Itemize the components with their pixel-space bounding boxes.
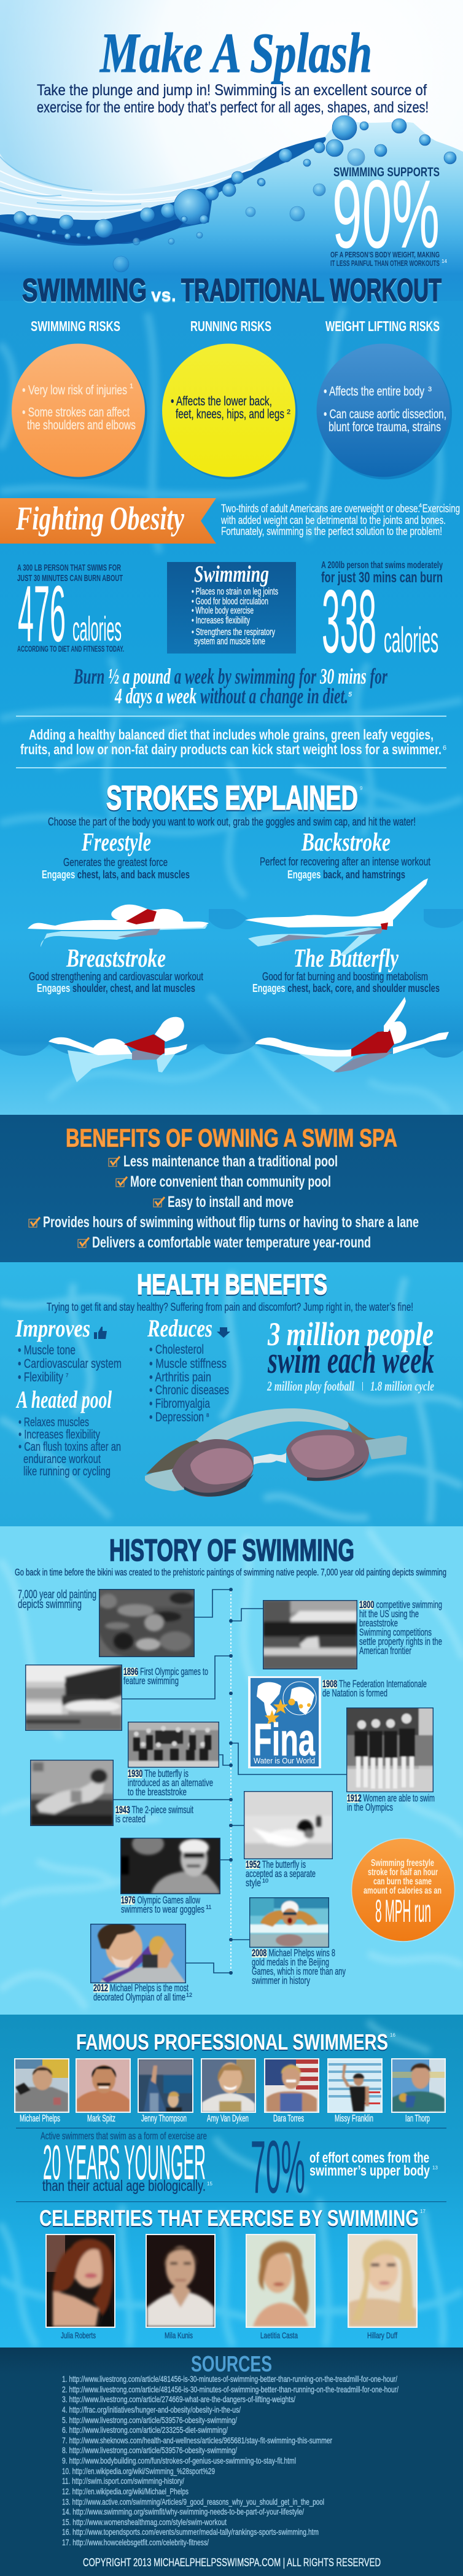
famous swimmers background xyxy=(0,2015,463,2348)
photo: 1800 competition xyxy=(263,1600,357,1669)
health benefits background xyxy=(0,1262,463,1526)
intro text xyxy=(37,82,429,116)
text: 1930: to the breaststroke xyxy=(128,1786,187,1798)
celebrity names: Mila Kunis xyxy=(165,2330,193,2340)
heading: strokes explained: 9 xyxy=(360,786,363,791)
stroke: backstroke: Backstroke xyxy=(301,829,391,857)
text: 1908 xyxy=(322,1678,427,1699)
heading: strokes explained xyxy=(48,778,416,828)
text: 2008: gold medals in the Beijing xyxy=(252,1956,329,1968)
panel: sources: 5. http://www.livestrong.com/article/539576-obesity-swimming/ xyxy=(62,2415,237,2425)
photo: Hillary Duff xyxy=(348,2234,418,2328)
ribbon: fighting obesity xyxy=(0,498,216,544)
panel: sources xyxy=(0,2348,463,2576)
text: 2012: decorated Olympian of all time xyxy=(93,1991,185,2003)
text: 1896: feature swimming xyxy=(123,1675,179,1687)
text: 2008: Games, which is more than any xyxy=(252,1965,346,1977)
photo: 1976 goggles xyxy=(120,1838,220,1894)
icon: swim goggles xyxy=(145,1408,407,1497)
text: 1930: 1930 The butterfly is xyxy=(128,1768,189,1779)
list: a heated pool: endurance workout xyxy=(23,1453,101,1466)
water scallops row one xyxy=(209,909,463,929)
panel: swimming risks: 1 xyxy=(130,383,133,390)
text: 2012: 2012 Michael Phelps is the most xyxy=(93,1982,189,1994)
swimmer names: Jenny Thompson xyxy=(141,2113,187,2124)
text: 1952: 10 xyxy=(262,1878,268,1884)
photo: prehistoric painting xyxy=(99,1589,195,1657)
photo: Ian Thorp xyxy=(391,2058,446,2113)
swimmer names: Amy Van Dyken xyxy=(207,2113,249,2124)
text: 1800 xyxy=(359,1599,442,1657)
panel: sources: 6. http://www.livestrong.com/article/233255-diet-swimming/ xyxy=(62,2425,228,2435)
celebrity names: Julia Roberts xyxy=(61,2330,96,2340)
heading: history of swimming: HISTORY OF SWIMMING xyxy=(109,1533,354,1567)
heading: history of swimming xyxy=(15,1533,446,1578)
divider xyxy=(16,2201,446,2202)
stat: 20 years younger: than their actual age biologically. xyxy=(42,2177,206,2195)
pool background with caustics xyxy=(0,301,463,1115)
text: 1912 xyxy=(347,1792,435,1813)
text: 7,000 year old painting: 7,000 year old painting xyxy=(18,1588,96,1601)
panel: swimming benefits list: • Whole body exercise xyxy=(192,606,254,616)
panel: running risks: 2 xyxy=(287,408,290,416)
photo: Michael Phelps xyxy=(14,2058,69,2113)
panel: sources: 11. http://swim.isport.com/swimming-history/ xyxy=(62,2476,184,2486)
photo: 2012 phelps xyxy=(90,1924,186,1983)
stroke: freestyle: Generates the greatest force xyxy=(63,856,168,868)
text: 7,000 year old painting: depicts swimming xyxy=(18,1598,82,1611)
photo: Mark Spitz xyxy=(76,2058,131,2113)
list: reduces: • Cholesterol xyxy=(149,1343,204,1357)
text: 1800: American frontier xyxy=(359,1645,411,1657)
stat: 70% upper body: 70% xyxy=(251,2125,305,2209)
text: obesity intro: 4 xyxy=(419,502,422,509)
text: 1976: 11 xyxy=(206,1904,211,1910)
text: 1930: introduced as an alternative xyxy=(128,1777,213,1789)
panel: running risks: feet, knees, hips, and legs xyxy=(176,407,284,421)
photo: Julia Roberts xyxy=(45,2234,115,2328)
text: 2008: swimmer in history xyxy=(252,1975,310,1986)
stat: 20 years younger xyxy=(41,2130,212,2195)
text: 1943 xyxy=(115,1804,193,1825)
stat: 70% upper body: 13 xyxy=(432,2165,438,2171)
text: 1976: 1976 Olympic Games allow xyxy=(121,1894,200,1906)
icon: thumbs up xyxy=(94,1327,107,1339)
panel: sources: 17. http://www.howcelebsgetfit.com/celebrity-fitness/ xyxy=(62,2537,209,2547)
panel: benefits of owning a swim spa: Less maintenance than a traditional pool xyxy=(123,1153,338,1170)
stat: 476 calories: 476 xyxy=(18,569,66,658)
swimmer names: Mark Spitz xyxy=(87,2113,115,2124)
list: reduces: • Muscle stiffness xyxy=(149,1357,227,1371)
icon: down arrow xyxy=(217,1327,230,1338)
stat: 3 million people: 1.8 million cycle xyxy=(370,1378,434,1394)
stat: 476 calories: A 300 LB PERSON THAT SWIMS FOR xyxy=(17,563,121,573)
logo: FINA: Fina xyxy=(254,1714,316,1765)
photo: Amy Van Dyken xyxy=(201,2058,256,2113)
list: a heated pool: A heated pool xyxy=(15,1386,112,1413)
panel: sources: 4. http://frac.org/initiatives/hunger-and-obesity/obesity-in-the-us/ xyxy=(62,2405,241,2414)
list: reduces: • Chronic diseases xyxy=(149,1383,229,1397)
text: 1930 xyxy=(128,1768,213,1798)
panel: swimming risks: the shoulders and elbows xyxy=(27,418,136,432)
ribbon: fighting obesity: Fighting Obesity xyxy=(15,500,185,537)
text: 2012 xyxy=(93,1982,192,2003)
stat: swimming supports 90%: 14 xyxy=(442,259,447,264)
text: obesity intro xyxy=(220,502,460,537)
text: 2008: 2008 Michael Phelps wins 8 xyxy=(252,1947,335,1959)
panel: swimming risks xyxy=(12,318,147,479)
panel: swimming benefits list xyxy=(167,561,296,654)
panel: swimming benefits list: • Good for blood circulation xyxy=(192,596,268,607)
stat: 20 years younger: 15 xyxy=(207,2181,212,2187)
panel: sources: 8. http://www.livestrong.com/article/539576-obesity-swimming/ xyxy=(62,2445,237,2455)
heading: swimming vs traditional workout xyxy=(22,273,442,308)
swimmer names xyxy=(20,2113,430,2124)
panel: sources: 10. http://en.wikipedia.org/wiki/Swimming_%28sport%29 xyxy=(62,2466,215,2476)
divider xyxy=(16,2128,446,2129)
panel: running risks: RUNNING RISKS xyxy=(190,318,271,334)
logo: FINA: Water is Our World xyxy=(254,1756,315,1765)
list: improves: • Muscle tone xyxy=(18,1343,76,1357)
stat: 476 calories: JUST 30 MINUTES CAN BURN ABOUT xyxy=(17,573,123,584)
swimmer names: Missy Franklin xyxy=(335,2113,373,2124)
panel: sources: 12. http://en.wikipedia.org/wiki/Michael_Phelps xyxy=(62,2486,189,2496)
celebrity names: Laetitia Casta xyxy=(260,2330,298,2340)
text: 1800: hit the US using the xyxy=(359,1608,419,1620)
panel: swimming risks: SWIMMING RISKS xyxy=(31,318,120,334)
icon: freestyle swimmer xyxy=(28,905,209,947)
list: improves: • Cardiovascular system xyxy=(18,1357,122,1371)
stroke: breaststroke: Engages shoulder, chest, and lat muscles xyxy=(37,982,195,994)
celebrity names xyxy=(61,2330,397,2340)
list: improves: Improves xyxy=(15,1314,90,1342)
stroke: butterfly: The Butterfly xyxy=(294,945,399,973)
swimmer names: Ian Thorp xyxy=(405,2113,430,2124)
text: 1976 xyxy=(121,1894,211,1915)
list: a heated pool: • Relaxes muscles xyxy=(18,1416,89,1429)
list: reduces xyxy=(147,1314,230,1424)
panel: benefits of owning a swim spa: More convenient than community pool xyxy=(130,1173,331,1190)
panel: sources: 7. http://www.sheknows.com/health-and-wellness/articles/965681/stay-fit-swimming-this-summer xyxy=(62,2435,332,2445)
title: Make A Splash xyxy=(99,21,372,84)
panel: swimming risks: • Some strokes can affect xyxy=(22,405,130,420)
icon: butterfly swimmer xyxy=(255,997,449,1072)
stroke: breaststroke xyxy=(29,945,203,994)
stat: 3 million people: 2 million play football xyxy=(267,1378,355,1394)
panel: benefits of owning a swim spa xyxy=(0,1115,463,1262)
list: improves: • Flexibility xyxy=(18,1370,63,1384)
panel: swimming benefits list: • Places no strain on leg joints xyxy=(192,587,278,597)
stroke: butterfly xyxy=(252,945,440,994)
swimmer names: Dara Torres xyxy=(273,2113,304,2124)
heading: swimming vs traditional workout: SWIMMING xyxy=(22,273,147,308)
panel: benefits of owning a swim spa: Easy to install and move xyxy=(168,1193,294,1211)
callout: freestyle calories circle: Swimming freestyle xyxy=(371,1858,434,1868)
panel: sources: 9. http://www.bodybuilding.com/fun/strokes-of-genius-use-swimming-to-stay-fit.html xyxy=(62,2456,296,2465)
stroke: backstroke: Engages back, and hamstrings xyxy=(287,868,405,881)
stat: 20 years younger: Active swimmers that swim as a form of exercise are xyxy=(41,2130,207,2142)
list: reduces: • Depression xyxy=(149,1410,204,1424)
callout: burn half a pound: 5 xyxy=(348,691,352,698)
panel: sources: 3. http://www.livestrong.com/article/274669-what-are-the-dangers-of-lifting-weights/ xyxy=(62,2394,295,2404)
list: a heated pool xyxy=(15,1386,121,1478)
list: a heated pool: like running or cycling xyxy=(23,1465,111,1478)
icon: breaststroke swimmer xyxy=(49,1017,187,1082)
panel: swimming benefits list: • Strengthens the respiratory xyxy=(192,627,275,638)
text: 1800: breaststroke xyxy=(359,1617,398,1629)
stroke: freestyle: Engages chest, lats, and back muscles xyxy=(42,868,190,881)
heading: celebrities: 17 xyxy=(420,2209,426,2214)
photo: 1943 swimsuit xyxy=(30,1760,114,1826)
stroke: breaststroke: Good strengthening and cardiovascular workout xyxy=(29,970,203,983)
photo: Dara Torres xyxy=(264,2058,319,2113)
logo: FINA xyxy=(248,1676,321,1768)
text: 1952: 1952 The butterfly is xyxy=(246,1859,306,1870)
header sky background xyxy=(0,0,463,307)
callout: burn half a pound: Burn ½ a pound a week by swimming for 30 mins for xyxy=(73,664,388,689)
water scallops row two xyxy=(0,998,463,1058)
panel: swimming risks: • Very low risk of injuries xyxy=(22,383,127,397)
text: 1908: de Natation is formed xyxy=(322,1687,387,1699)
photo: Mila Kunis xyxy=(146,2234,216,2328)
text: 1943: is created xyxy=(115,1813,146,1825)
text: healthy diet xyxy=(16,716,446,768)
heading: health benefits xyxy=(47,1268,413,1313)
list: a heated pool: • Can flush toxins after an xyxy=(18,1440,121,1454)
panel: running risks: • Affects the lower back, xyxy=(171,394,272,408)
stroke: backstroke xyxy=(260,829,430,881)
text: 1912: in the Olympics xyxy=(347,1801,393,1813)
text: 2008 xyxy=(252,1947,346,1986)
panel: sources: 15. http://www.womenshealthmag.com/style/swim-workout xyxy=(62,2517,227,2527)
list: improves: 7 xyxy=(66,1373,69,1378)
panel: sources: SOURCES xyxy=(191,2351,272,2376)
list: reduces: Reduces xyxy=(147,1314,212,1342)
photo: 1952 butterfly xyxy=(244,1791,333,1859)
water wave illustration xyxy=(0,115,463,307)
photo: Laetitia Casta xyxy=(246,2234,316,2328)
text: 1896: 1896 First Olympic games to xyxy=(123,1666,208,1677)
list: a heated pool: • Increases flexibility xyxy=(18,1428,100,1442)
list: reduces: 8 xyxy=(206,1413,209,1418)
text: 7,000 year old painting xyxy=(18,1588,96,1611)
photo: 2008 phelps xyxy=(249,1897,329,1948)
text: 1943: 1943 The 2-piece swimsuit xyxy=(115,1804,193,1816)
heading: health benefits: HEALTH BENEFITS xyxy=(137,1268,327,1300)
text: calories xyxy=(72,609,122,648)
photo: 1930 team xyxy=(128,1722,219,1768)
timeline xyxy=(114,1588,346,1975)
panel: weight lifting risks xyxy=(317,318,452,479)
heading: swimming vs traditional workout: vs. xyxy=(151,285,176,305)
callout: freestyle calories circle: can burn the same xyxy=(373,1876,432,1887)
celebrity names: Hillary Duff xyxy=(367,2330,397,2340)
history background xyxy=(0,1526,463,2015)
text: healthy diet: 6 xyxy=(443,744,446,752)
heading: famous professional swimmers: 16 xyxy=(390,2032,395,2038)
text: 1952: style xyxy=(246,1877,261,1889)
panel: swimming benefits list: Swimming xyxy=(194,561,269,587)
stroke: freestyle: Freestyle xyxy=(81,829,151,857)
photo: 1912 women xyxy=(346,1708,434,1792)
panel: swimming benefits list: • Increases flexibility xyxy=(192,615,250,626)
swimmer names: Michael Phelps xyxy=(20,2113,60,2124)
panel: sources: 14. http://www.swimming.org/swimfit/why-swimming-needs-to-be-part-of-your-lifestyle/ xyxy=(62,2507,304,2516)
callout: burn half a pound xyxy=(73,664,388,708)
callout: burn half a pound: 4 days a week without a change in diet. xyxy=(114,684,348,708)
text: 1896 xyxy=(123,1666,208,1687)
stat: 476 calories: ACCORDING TO DIET AND FITNESS TODAY. xyxy=(17,644,124,654)
panel: weight lifting risks: • Affects the entire body xyxy=(324,384,424,399)
panel: sources: 16. http://www.topendsports.com/events/summer/medal-tally/rankings-sports-swimming.htm xyxy=(62,2527,319,2537)
list: reduces: • Arthritis pain xyxy=(149,1370,211,1384)
stroke: breaststroke: Breaststroke xyxy=(66,945,166,973)
photo: Jenny Thompson xyxy=(138,2058,193,2113)
text: 1952: accepted as a separate xyxy=(246,1868,316,1879)
icon: backstroke swimmer xyxy=(245,878,428,956)
list: reduces: • Fibromyalgia xyxy=(149,1397,210,1411)
text: 1976: swimmers to wear goggles xyxy=(121,1903,204,1915)
stat: 3 million people xyxy=(267,1316,434,1394)
panel: running risks xyxy=(162,318,297,479)
photo: 1896 olympics xyxy=(25,1665,122,1731)
panel: weight lifting risks: 3 xyxy=(428,386,432,393)
panel: sources: 13. http://www.active.com/swimming/Articles/9_good_reasons_why_you_should_get_in_the_pool xyxy=(62,2497,324,2507)
stroke: freestyle xyxy=(42,829,190,881)
list: improves xyxy=(15,1314,122,1384)
photo: Missy Franklin xyxy=(327,2058,383,2113)
text: 2012: 12 xyxy=(186,1992,192,1998)
callout: freestyle calories circle xyxy=(351,1838,454,1942)
panel: swimming benefits list: system and muscle tone xyxy=(194,636,265,647)
text: 1952 xyxy=(246,1859,316,1889)
